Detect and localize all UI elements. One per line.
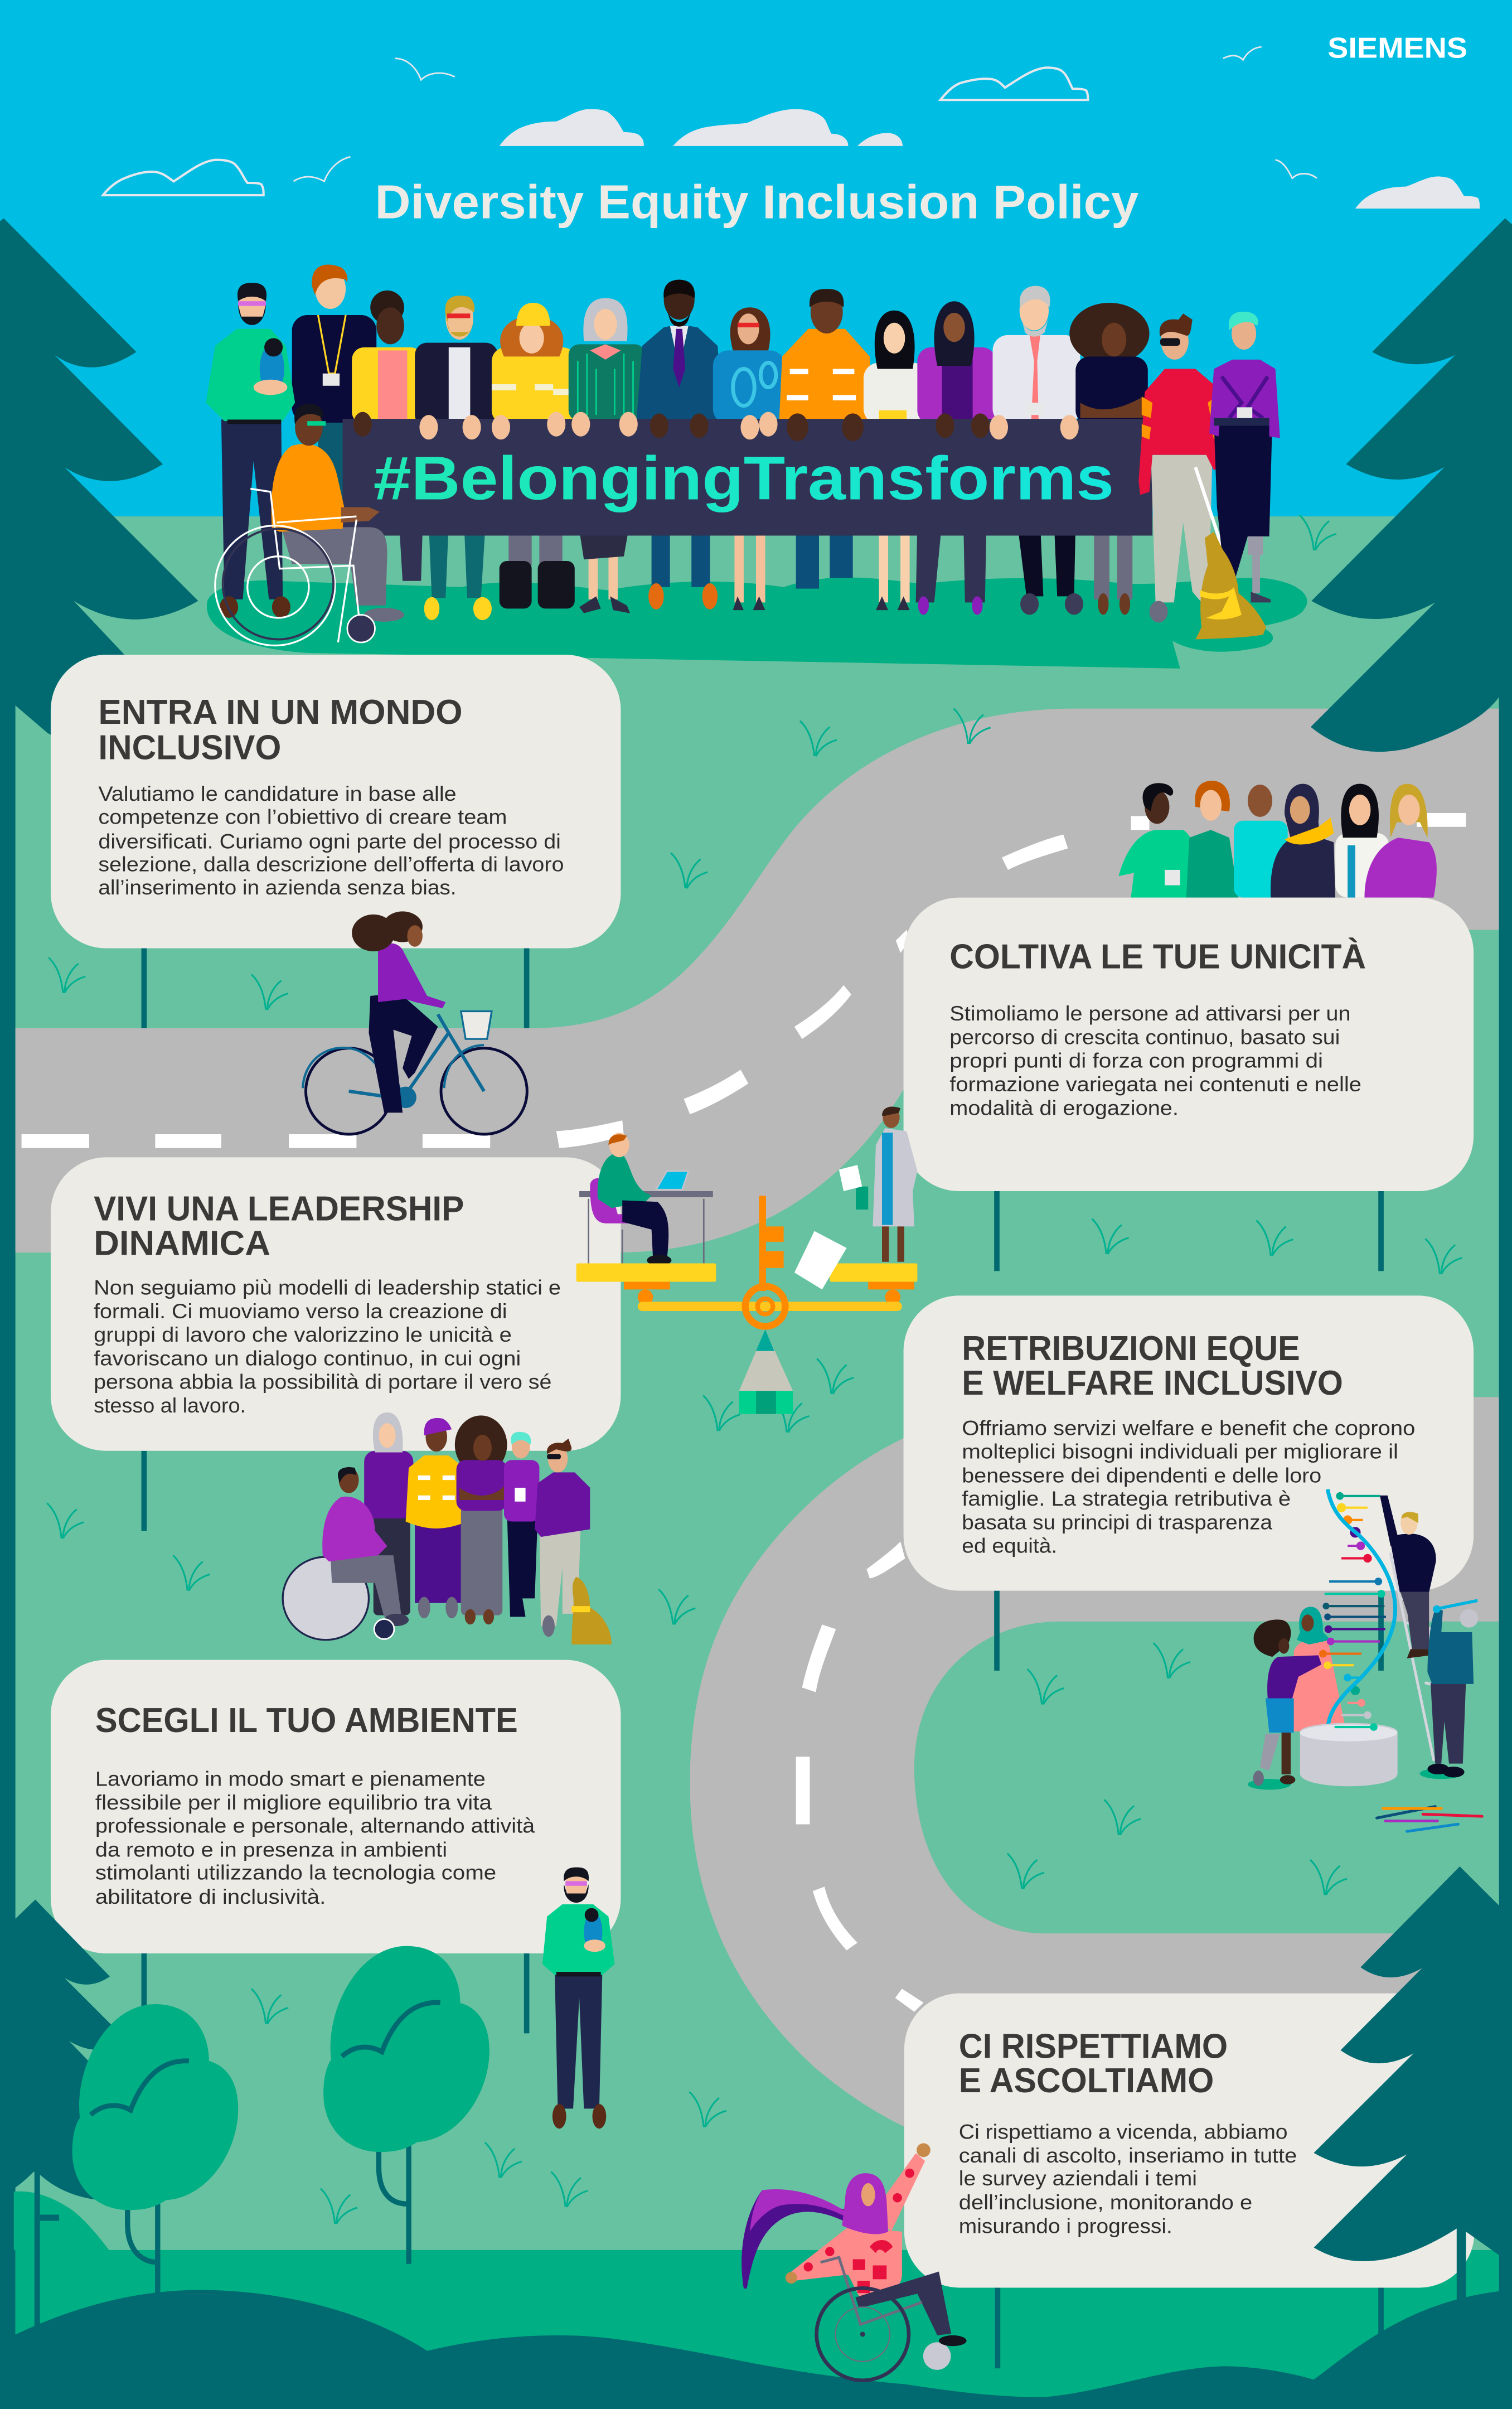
trees: upper left fir [0, 218, 198, 741]
panel: entra in un mondo inclusivo: all’inserimento in azienda senza bias. [98, 875, 457, 899]
left green hillock [14, 2192, 109, 2250]
person: green scrubs [1118, 783, 1196, 898]
ladder [1390, 1554, 1445, 1760]
clouds [103, 67, 1480, 209]
people group above card two [1118, 781, 1437, 898]
panel: ci rispettiamo e ascoltiamo: canali di ascolto, inseriamo in tutte [959, 2144, 1297, 2167]
panel: retribuzioni eque e welfare inclusivo: molteplici bisogni individuali per migliorare il [962, 1440, 1398, 1463]
wheelchair [215, 488, 360, 646]
people group below card three [283, 1412, 612, 1644]
person: man with baby [542, 1868, 614, 2129]
panel: scegli il tuo ambiente: stimolanti utilizzando la tecnologia come [95, 1861, 496, 1884]
panel: coltiva le tue unicità: propri punti di forza con programmi di [949, 1049, 1323, 1072]
panel: coltiva le tue unicità: percorso di crescita continuo, basato sui [949, 1025, 1340, 1048]
person: white coat [1335, 784, 1389, 898]
person: grey hair [364, 1412, 413, 1615]
banner hands [419, 412, 1079, 439]
lower left fir trunk [35, 2171, 59, 2333]
person: woman in yellow jacket [352, 291, 423, 581]
person: woman with dark hijab [916, 301, 996, 615]
person: woman with lab coat on scale [839, 1106, 917, 1262]
panel: coltiva le tue unicità: Stimoliamo le persone ad attivarsi per un [949, 1002, 1351, 1025]
person: woman with curly hair [1069, 303, 1150, 615]
background: sky [0, 0, 1512, 516]
person: man at desk on scale [579, 1133, 713, 1266]
background: bottom green [16, 2250, 1499, 2409]
panel: retribuzioni eque e welfare inclusivo: RETRIBUZIONI EQUE [962, 1329, 1300, 1368]
dog: guide dog [571, 1577, 612, 1644]
panel: retribuzioni eque e welfare inclusivo [904, 1295, 1474, 1591]
panel: vivi una leadership dinamica: DINAMICA [94, 1224, 270, 1262]
person: curly hair [455, 1415, 507, 1624]
person: older man with telescope [1427, 1600, 1478, 1777]
platform brackets [624, 1282, 914, 1305]
cards [51, 655, 1474, 2287]
road: upper winding road [16, 709, 1499, 1252]
panel: coltiva le tue unicità: modalità di erogazione. [949, 1096, 1179, 1119]
tree one [72, 2004, 238, 2297]
person: man with red glasses [415, 296, 498, 620]
person: woman in hijab [1292, 1607, 1346, 1731]
panel: ci rispettiamo e ascoltiamo: Ci rispettiamo a vicenda, abbiamo [959, 2120, 1288, 2143]
person: man in blue suit [636, 280, 724, 609]
person: man with baby in green shirt [206, 283, 295, 618]
panel: scegli il tuo ambiente: da remoto e in presenza in ambienti [95, 1837, 447, 1861]
panel: retribuzioni eque e welfare inclusivo: famiglie. La strategia retributiva è [962, 1487, 1291, 1510]
panel: entra in un mondo inclusivo: selezione, dalla descrizione dell’offerta di lavoro [98, 853, 564, 876]
panel: scegli il tuo ambiente: flessibile per il migliore equilibrio tra vita [95, 1791, 492, 1814]
person: woman with grey hair [569, 298, 646, 613]
background: meadow [0, 516, 1512, 2409]
panel: ci rispettiamo e ascoltiamo: CI RISPETTIAMO [959, 2027, 1228, 2065]
panel: scegli il tuo ambiente: Lavoriamo in modo smart e pienamente [95, 1767, 486, 1791]
person: woman in white blouse [864, 311, 928, 610]
trees: lower left fir [0, 1900, 154, 2201]
panel: retribuzioni eque e welfare inclusivo: ed equità. [962, 1534, 1057, 1557]
panel: scegli il tuo ambiente: SCEGLI IL TUO AMBIENTE [95, 1701, 518, 1740]
panel: scegli il tuo ambiente: abilitatore di inclusività. [95, 1885, 326, 1908]
person: wheelchair man in purple [283, 1467, 409, 1640]
person: woman with curly hair [1253, 1619, 1321, 1786]
panel: entra in un mondo inclusivo [51, 655, 621, 949]
panel: ci rispettiamo e ascoltiamo: E ASCOLTIAMO [959, 2062, 1214, 2100]
key [759, 1196, 784, 1291]
panel: scegli il tuo ambiente: professionale e personale, alternando attività [95, 1814, 535, 1837]
panel: retribuzioni eque e welfare inclusivo: basata su principi di trasparenza [962, 1510, 1272, 1534]
person: woman with yellow hard hat [492, 303, 576, 608]
person: purple top with prosthetic leg [1209, 312, 1280, 602]
pencil stand [739, 1329, 793, 1414]
trees: upper right fir [1311, 218, 1512, 752]
person: yellow vest [406, 1418, 467, 1618]
road: lower curved road [690, 1397, 1499, 2198]
person: hijab [1271, 784, 1335, 898]
beam [638, 1302, 902, 1311]
person: man in white shirt [992, 286, 1083, 615]
grass tufts [47, 515, 1462, 2224]
dog: guide dog [1195, 532, 1266, 640]
cylinder [1300, 1723, 1398, 1786]
far right fir trunk [1457, 2226, 1466, 2305]
helix [1327, 1489, 1395, 1731]
rungs [1319, 1492, 1386, 1719]
panel: vivi una leadership dinamica: stesso al lavoro. [94, 1394, 246, 1417]
panel: vivi una leadership dinamica: formali. Ci muoviamo verso la creazione di [94, 1299, 507, 1323]
left platform [576, 1264, 716, 1282]
person: mint hair [504, 1432, 539, 1617]
key ring [745, 1286, 785, 1327]
title: Diversity Equity Inclusion Policy [375, 176, 1139, 229]
person: wheelchair woman with flying scarf [742, 2143, 967, 2381]
panel: vivi una leadership dinamica: VIVI UNA LEADERSHIP [94, 1189, 464, 1228]
panel: entra in un mondo inclusivo: INCLUSIVO [98, 729, 281, 767]
people group at the banner [292, 265, 1150, 620]
panel: retribuzioni eque e welfare inclusivo: benessere dei dipendenti e delle loro [962, 1463, 1321, 1487]
person: cyan shirt [1234, 785, 1288, 898]
panel: entra in un mondo inclusivo: competenze con l’obiettivo di creare team [98, 805, 507, 828]
trees: lower right fir [1314, 1866, 1512, 2261]
tree two [323, 1946, 490, 2264]
signboard posts [142, 949, 1384, 2368]
siemens logo: SIEMENS [1327, 32, 1467, 64]
person: man on ladder [1380, 1496, 1436, 1658]
trees: green round trees [72, 1946, 490, 2297]
scale with key and pencil stand [576, 1196, 917, 1414]
side trunks [0, 615, 1512, 2409]
panel: scegli il tuo ambiente [51, 1660, 621, 1953]
panel: vivi una leadership dinamica: Non seguiamo più modelli di leadership statici e [94, 1276, 561, 1299]
panel: ci rispettiamo e ascoltiamo: dell’inclusione, monitorando e [959, 2190, 1252, 2214]
panel: ci rispettiamo e ascoltiamo: le survey aziendali i temi [959, 2166, 1197, 2190]
person: purple uniform [1364, 784, 1437, 898]
panel: vivi una leadership dinamica: favoriscano un dialogo continuo, in cui ogni [94, 1347, 521, 1370]
panel: vivi una leadership dinamica: gruppi di lavoro che valorizzino le unicità e [94, 1323, 512, 1346]
banner [343, 412, 1152, 536]
hashtag: #BelongingTransforms [374, 444, 1114, 513]
person: sunglasses [535, 1439, 590, 1637]
panel: coltiva le tue unicità: COLTIVA LE TUE UNICITÀ [949, 937, 1366, 976]
panel: coltiva le tue unicità: formazione variegata nei contenuti e nelle [949, 1072, 1361, 1096]
panel: ci rispettiamo e ascoltiamo: misurando i progressi. [959, 2214, 1172, 2238]
person: red sweater with white cane [1138, 313, 1232, 622]
ground shadows [1248, 1768, 1463, 1789]
panel: entra in un mondo inclusivo: ENTRA IN UN MONDO [98, 693, 463, 732]
panel: retribuzioni eque e welfare inclusivo: E WELFARE INCLUSIVO [962, 1364, 1343, 1402]
right platform [830, 1264, 917, 1282]
panel: ci rispettiamo e ascoltiamo [904, 1994, 1474, 2287]
panel: vivi una leadership dinamica: persona abbia la possibilità di portare il vero sé [94, 1370, 551, 1394]
loose rungs [1377, 1807, 1482, 1831]
person: wheelchair man in orange [215, 404, 404, 646]
inner meadow enclosed by road [914, 1622, 1499, 1933]
panel: retribuzioni eque e welfare inclusivo: Offriamo servizi welfare e benefit che coprono [962, 1416, 1415, 1439]
paper [794, 1231, 847, 1289]
panel: entra in un mondo inclusivo: Valutiamo le candidature in base alle [98, 782, 457, 805]
person: tall man with lanyard [292, 265, 376, 532]
dna helix and people [1248, 1489, 1482, 1831]
person: man in orange hi-vis [779, 289, 873, 589]
person: woman in blue dress [713, 307, 785, 610]
birds [293, 47, 1317, 181]
panel: vivi una leadership dinamica [51, 1157, 621, 1451]
road dashes [22, 813, 1466, 2012]
panel: coltiva le tue unicità [904, 898, 1474, 1191]
foreground wave [0, 2290, 1512, 2409]
ground patch beneath the group [207, 578, 1307, 669]
person: patterned green dress [1186, 781, 1238, 898]
person: cyclist [303, 911, 527, 1134]
panel: entra in un mondo inclusivo: diversificati. Curiamo ogni parte del processo di [98, 829, 561, 853]
